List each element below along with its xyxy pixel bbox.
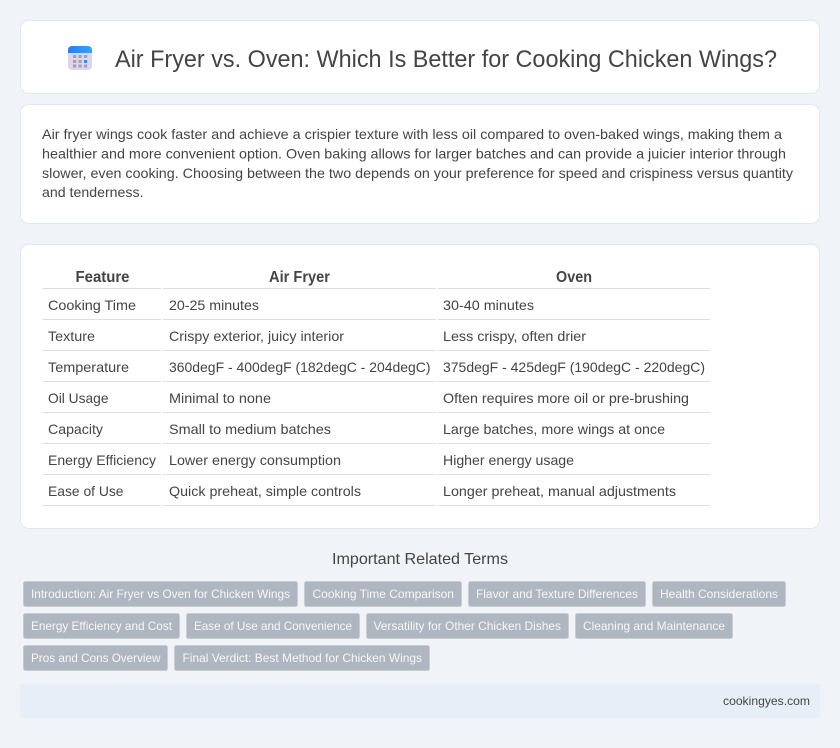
tag bbox=[186, 614, 360, 638]
table row: capacity: Large batches, more wings at once bbox=[443, 421, 665, 437]
text block: summary: and tenderness. bbox=[42, 184, 144, 200]
table row: texture: Texture bbox=[48, 328, 95, 344]
panel: introduction bbox=[20, 104, 820, 224]
tag bbox=[652, 582, 786, 606]
table row: ease of use: Longer preheat, manual adjustments bbox=[443, 483, 676, 499]
table row: oil usage: Often requires more oil or pre-brushing bbox=[443, 390, 689, 406]
tag: Cleaning and Maintenance bbox=[583, 619, 725, 633]
tag: Health Considerations bbox=[660, 587, 778, 601]
text block: summary: healthier and more convenient option. Oven baking allows for larger batches and can provide a juicier interior through bbox=[42, 146, 786, 162]
table row: capacity bbox=[43, 421, 710, 444]
tag: Flavor and Texture Differences bbox=[476, 587, 638, 601]
tag bbox=[468, 582, 646, 606]
table row: capacity: Capacity bbox=[48, 421, 103, 437]
table header row bbox=[43, 269, 710, 289]
title: Air Fryer vs. Oven: Which Is Better for Cooking Chicken Wings? bbox=[115, 46, 777, 73]
table row: energy efficiency bbox=[43, 452, 710, 475]
tag: Final Verdict: Best Method for Chicken Wings bbox=[182, 651, 422, 665]
table row: oil usage: Minimal to none bbox=[169, 390, 271, 406]
table row: texture bbox=[43, 328, 710, 351]
tag bbox=[24, 646, 168, 670]
heading: related terms: Important Related Terms bbox=[332, 551, 508, 568]
tag: Cooking Time Comparison bbox=[312, 587, 454, 601]
table row: temperature: 360degF - 400degF (182degC - 204degC) bbox=[169, 359, 430, 375]
table header row: Feature bbox=[76, 269, 130, 286]
tag bbox=[366, 614, 568, 638]
table row: cooking time: Cooking Time bbox=[48, 297, 136, 313]
tag bbox=[24, 582, 298, 606]
text block: summary: slower, even cooking. Choosing between the two depends on your preference for speed and crispiness versus quantity bbox=[42, 165, 793, 181]
table row: oil usage: Oil Usage bbox=[48, 390, 109, 406]
table row: capacity: Small to medium batches bbox=[169, 421, 331, 437]
table row: energy efficiency: Higher energy usage bbox=[443, 452, 574, 468]
table header row: Air Fryer bbox=[269, 269, 330, 286]
tag: Versatility for Other Chicken Dishes bbox=[374, 619, 561, 633]
table row: texture: Less crispy, often drier bbox=[443, 328, 586, 344]
table row: ease of use bbox=[43, 483, 710, 506]
table row: ease of use: Quick preheat, simple controls bbox=[169, 483, 361, 499]
tag: Pros and Cons Overview bbox=[31, 651, 161, 665]
tag bbox=[304, 582, 462, 606]
table row: cooking time: 20-25 minutes bbox=[169, 297, 259, 313]
table row: energy efficiency: Lower energy consumption bbox=[169, 452, 341, 468]
table row: temperature: Temperature bbox=[48, 359, 129, 375]
table row: oil usage bbox=[43, 390, 710, 413]
footer bbox=[20, 684, 820, 718]
table row: energy efficiency: Energy Efficiency bbox=[48, 452, 156, 468]
table header row: Oven bbox=[556, 269, 592, 286]
table row: temperature: 375degF - 425degF (190degC - 220degC) bbox=[443, 359, 705, 375]
tag bbox=[24, 614, 180, 638]
text block: summary: Air fryer wings cook faster and achieve a crispier texture with less oil compared to oven-baked wings, making them a bbox=[42, 126, 782, 142]
tag bbox=[576, 614, 732, 638]
table row: cooking time: 30-40 minutes bbox=[443, 297, 534, 313]
footer source text: cookingyes.com bbox=[723, 694, 810, 708]
text block: summary bbox=[42, 126, 793, 200]
table row: ease of use: Ease of Use bbox=[48, 483, 124, 499]
tag list: related terms bbox=[24, 582, 786, 670]
panel: comparison table bbox=[20, 244, 820, 528]
tag: Ease of Use and Convenience bbox=[194, 619, 352, 633]
table row: temperature bbox=[43, 359, 710, 382]
tag bbox=[174, 646, 430, 670]
panel: header bbox=[20, 20, 820, 94]
table row: texture: Crispy exterior, juicy interior bbox=[169, 328, 344, 344]
tag: Energy Efficiency and Cost bbox=[31, 619, 173, 633]
tag: Introduction: Air Fryer vs Oven for Chicken Wings bbox=[31, 587, 290, 601]
table row: cooking time bbox=[43, 297, 710, 320]
icon: calendar bbox=[68, 46, 92, 70]
